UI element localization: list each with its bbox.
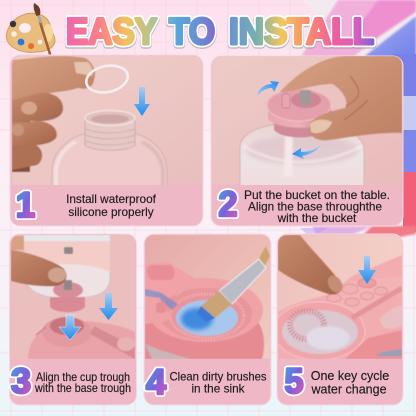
- photo: finger pressing button: [273, 235, 402, 360]
- caption 2: Put the bucket on the table.: [244, 188, 390, 202]
- caption 2: Align the base throughthe: [248, 200, 382, 214]
- arrow curved top: [257, 81, 279, 96]
- number 2: 2: [218, 185, 238, 224]
- title: INSTALL: [229, 11, 374, 52]
- photo: cup aligned over base: [11, 235, 135, 359]
- number 4: 4: [146, 363, 167, 402]
- title: [66, 11, 374, 53]
- caption 4: in the sink: [191, 382, 245, 396]
- caption 4: Clean dirty brushes: [170, 370, 267, 384]
- photo: brush in sink: [145, 235, 270, 359]
- caption 5: One key cycle: [311, 369, 389, 383]
- paint strokes background: [296, 0, 416, 246]
- panel: step 2: [211, 56, 403, 226]
- photo: hand and bottle with ring: [12, 56, 202, 190]
- number 5: 5: [284, 362, 304, 401]
- caption 4: [170, 370, 267, 396]
- arrow centre down: [59, 315, 81, 340]
- title: INSTALL: [229, 12, 374, 53]
- panel: step 5: [273, 234, 403, 405]
- caption 5: [310, 369, 389, 396]
- title: EASY: [66, 12, 157, 53]
- photo: hand turning base on bottle: [212, 56, 402, 190]
- number 1: 1: [16, 186, 35, 225]
- caption 2: with the bucket: [277, 211, 357, 225]
- caption 2: [244, 188, 390, 225]
- title: INSTALL: [229, 11, 374, 52]
- arrow curved lower: [292, 145, 321, 159]
- silicone ring: [84, 62, 130, 96]
- title: EASY: [66, 11, 157, 52]
- number 3: 3: [11, 362, 31, 401]
- caption 1: Install waterproof: [66, 192, 157, 206]
- caption 3: Align the cup trough: [36, 370, 130, 384]
- title: TO: [169, 11, 215, 52]
- arrow down: [358, 256, 376, 284]
- title: TO: [169, 12, 215, 53]
- caption 3: [34, 370, 131, 395]
- panel: step 3: [10, 234, 136, 405]
- panel: step 4: [144, 234, 271, 405]
- title: EASY: [66, 11, 157, 52]
- icon: paint palette: [6, 3, 55, 54]
- arrow down: [134, 87, 150, 116]
- panel: step 1: [10, 55, 203, 226]
- number 2: 2: [218, 185, 238, 224]
- number 4: 4: [146, 363, 167, 402]
- title: TO: [169, 11, 215, 52]
- caption 3: with the base trough: [34, 381, 131, 395]
- number 5: 5: [284, 362, 304, 401]
- number 3: 3: [11, 362, 31, 401]
- number 1: 1: [16, 186, 35, 225]
- caption 5: water change: [310, 382, 387, 396]
- caption 1: silicone properly: [68, 205, 154, 219]
- arrow right down: [99, 293, 118, 320]
- caption 1: [66, 192, 157, 219]
